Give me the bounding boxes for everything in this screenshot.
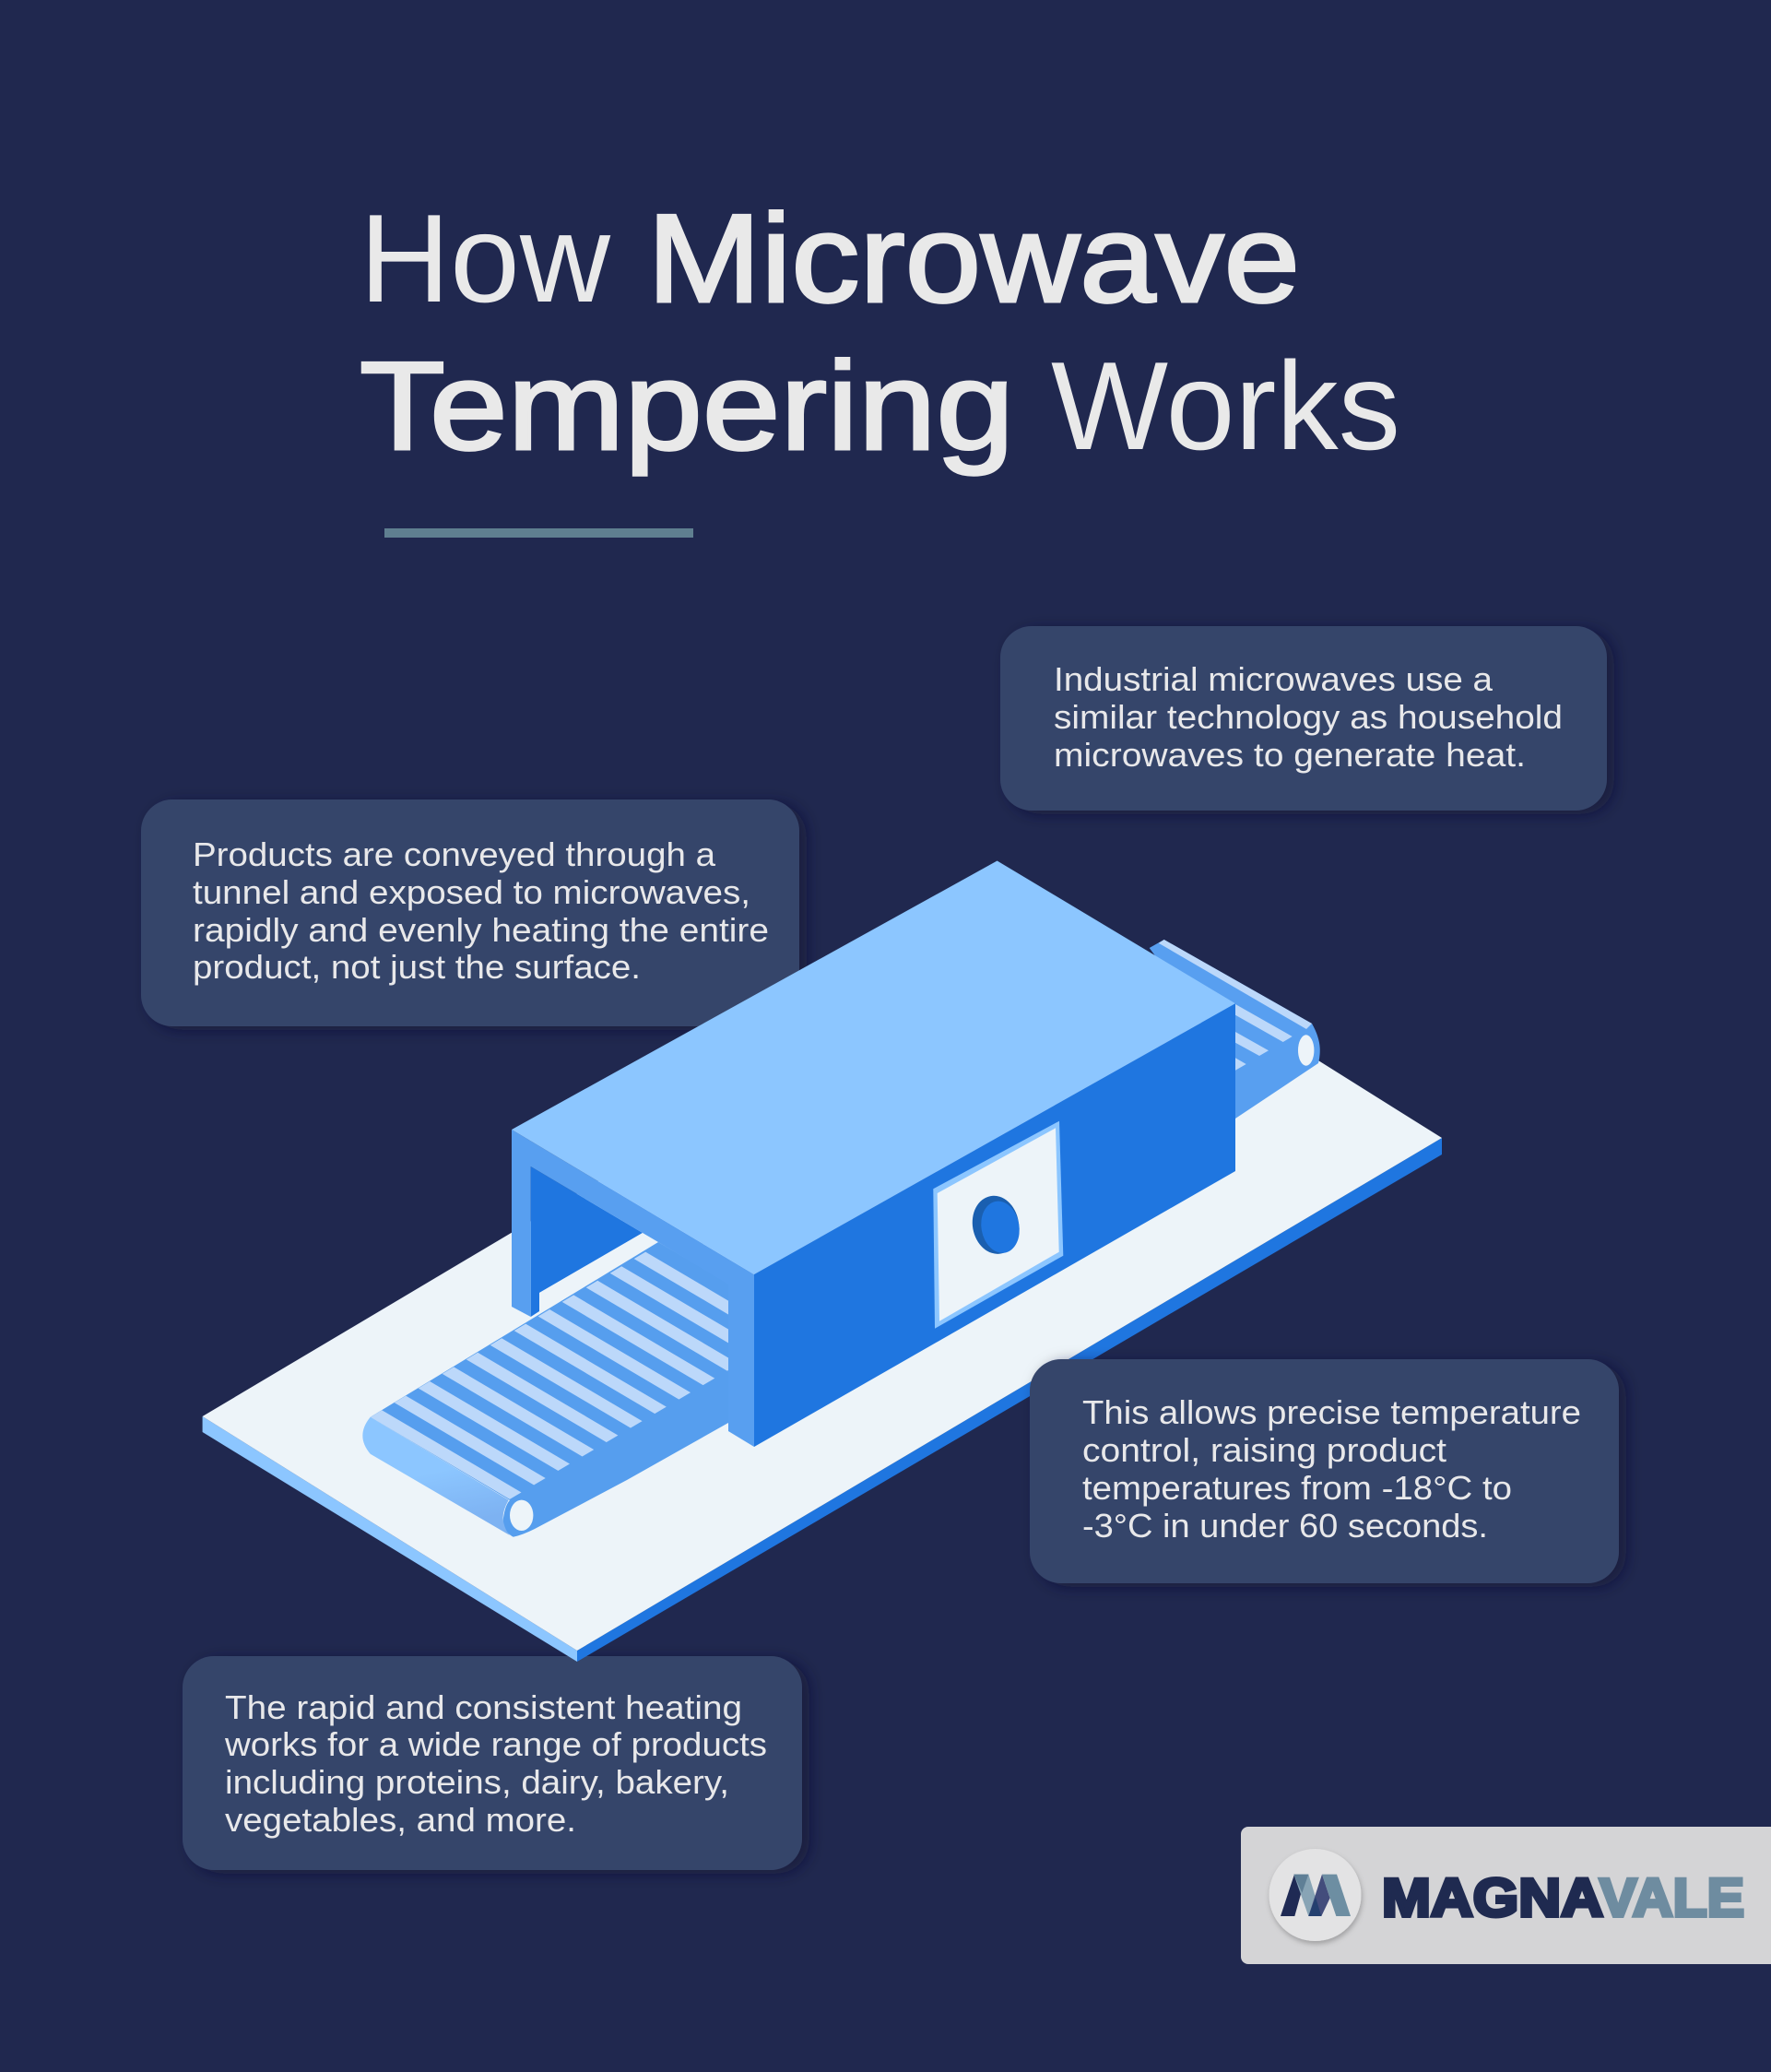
callout: precise temperature control: control, raising product bbox=[1082, 1431, 1446, 1469]
callout: wide range of products: The rapid and consistent heating bbox=[225, 1688, 742, 1726]
callout: precise temperature control: This allows precise temperature bbox=[1082, 1393, 1581, 1431]
illustration: microwave tunnel on conveyor bbox=[203, 861, 1442, 1662]
title: Tempering bbox=[360, 336, 1014, 476]
callout: wide range of products: including proteins, dairy, bakery, bbox=[225, 1763, 729, 1801]
logo: Magnavale bbox=[1241, 1827, 1771, 1964]
front conveyor belt bbox=[362, 1242, 728, 1537]
callout: wide range of products: works for a wide range of products bbox=[224, 1725, 767, 1763]
back conveyor roller bbox=[1150, 940, 1320, 1119]
title: Microwave bbox=[647, 188, 1300, 328]
callout: precise temperature control: temperatures from -18°C to bbox=[1082, 1469, 1512, 1507]
control window bbox=[933, 1121, 1063, 1329]
tunnel top face bbox=[512, 861, 1235, 1274]
callout: precise temperature control: -3°C in under 60 seconds. bbox=[1082, 1507, 1488, 1545]
title bbox=[360, 188, 1400, 476]
logo wordmark: VALE bbox=[1600, 1868, 1744, 1928]
callout: industrial microwaves: microwaves to generate heat. bbox=[1054, 736, 1526, 774]
title: Works bbox=[1051, 336, 1400, 476]
tunnel interior bbox=[531, 1166, 643, 1317]
logo wordmark bbox=[1382, 1868, 1744, 1928]
callout: industrial microwaves: similar technology as household bbox=[1054, 698, 1563, 736]
callout: conveyed through a tunnel: tunnel and exposed to microwaves, bbox=[193, 873, 750, 911]
callout: conveyed through a tunnel bbox=[141, 799, 799, 1026]
callout: conveyed through a tunnel: rapidly and evenly heating the entire bbox=[193, 911, 769, 949]
callout: conveyed through a tunnel: Products are conveyed through a bbox=[193, 835, 716, 873]
logo wordmark: MAGNA bbox=[1382, 1868, 1603, 1928]
callout: industrial microwaves bbox=[1000, 626, 1607, 811]
gap of platform visible in tunnel bbox=[539, 1233, 658, 1311]
title divider bbox=[384, 528, 693, 538]
platform base bbox=[203, 903, 1442, 1662]
title: How bbox=[360, 188, 611, 328]
tunnel side face bbox=[754, 1003, 1235, 1447]
callout: wide range of products: vegetables, and more. bbox=[225, 1801, 576, 1839]
callout: wide range of products bbox=[183, 1656, 802, 1870]
callout: precise temperature control bbox=[1030, 1359, 1619, 1583]
callout: industrial microwaves: Industrial microwaves use a bbox=[1054, 660, 1494, 698]
tunnel front face bbox=[512, 1130, 754, 1447]
callout: conveyed through a tunnel: product, not just the surface. bbox=[193, 948, 641, 986]
logo emblem bbox=[1269, 1849, 1361, 1941]
